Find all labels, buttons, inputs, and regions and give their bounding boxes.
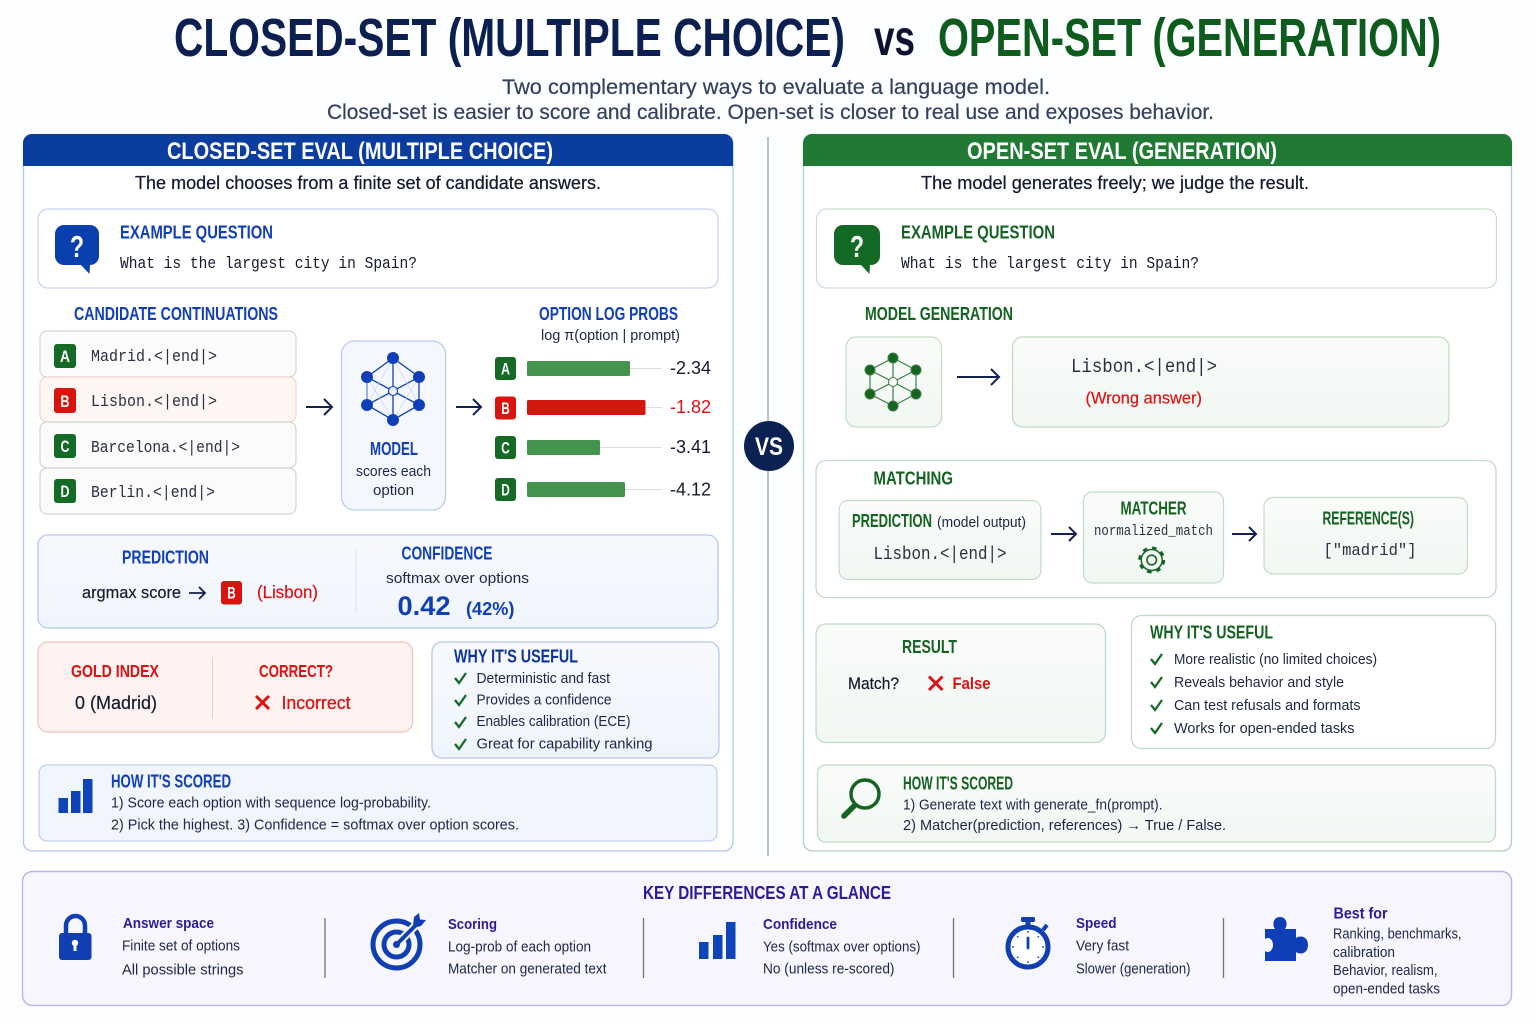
model label: MODEL bbox=[370, 439, 418, 459]
prediction box: PREDICTION bbox=[852, 511, 932, 531]
item: scoring: Log-prob of each option bbox=[448, 940, 591, 956]
icon: stopwatch bbox=[1008, 917, 1048, 967]
result box bbox=[816, 624, 1106, 742]
item: answer space: All possible strings bbox=[122, 962, 244, 978]
generated text: Lisbon.<|end|> bbox=[1071, 356, 1217, 378]
panel description: open-set: The model generates freely; we judge the result. bbox=[921, 173, 1309, 193]
heading: result: RESULT bbox=[902, 637, 957, 657]
why it's useful box: closed-set bbox=[432, 642, 719, 758]
heading: candidate continuations: CANDIDATE CONTINUATIONS bbox=[74, 304, 278, 324]
prediction and confidence box bbox=[38, 535, 718, 628]
arrow: model to generated text bbox=[957, 369, 999, 385]
heading: option log probs: OPTION LOG PROBS bbox=[539, 304, 678, 324]
match verdict bbox=[848, 674, 990, 693]
benefit list: More realistic (no limited choices) bbox=[1174, 652, 1377, 668]
bar D: D bbox=[501, 480, 510, 500]
icon: question bubble: ? bbox=[70, 229, 84, 264]
model box bbox=[342, 341, 446, 510]
item: scoring: Matcher on generated text bbox=[448, 962, 606, 978]
how it's scored box: open-set bbox=[818, 765, 1496, 842]
item: best for: calibration bbox=[1333, 945, 1395, 961]
model caption bbox=[356, 464, 431, 499]
item: scoring: Scoring bbox=[448, 916, 497, 933]
why it's useful box: open-set bbox=[1132, 616, 1496, 748]
confidence caption: softmax over options bbox=[386, 571, 529, 587]
scoring steps bbox=[903, 798, 1226, 834]
confidence value bbox=[398, 591, 514, 621]
bar C: -3.41 bbox=[670, 436, 711, 457]
confidence value: (42%) bbox=[466, 598, 514, 619]
matcher box: MATCHER bbox=[1120, 498, 1186, 518]
argmax line: B bbox=[227, 584, 236, 602]
option C: Barcelona.<|end|> bbox=[91, 438, 240, 457]
scoring steps: 2) Pick the highest. 3) Confidence = softmax over option scores. bbox=[111, 818, 519, 834]
item: best for bbox=[1265, 906, 1462, 998]
option C bbox=[40, 422, 296, 468]
matching panel bbox=[816, 460, 1496, 598]
icon: network bbox=[865, 353, 921, 411]
candidate list bbox=[40, 331, 296, 514]
subtitle: Closed-set is easier to score and calibrate. Open-set is closer to real use and exposes behavior. bbox=[327, 101, 1214, 124]
how it's scored box: closed-set bbox=[39, 765, 717, 841]
subtitle bbox=[327, 76, 1214, 124]
item: best for: Ranking, benchmarks, bbox=[1333, 926, 1462, 942]
gold index and correctness box bbox=[38, 642, 412, 732]
heading: correct: CORRECT? bbox=[259, 661, 333, 681]
gold value: 0 (Madrid) bbox=[75, 692, 157, 713]
bar C bbox=[495, 436, 711, 459]
icon: bar chart bbox=[58, 779, 92, 813]
benefit list bbox=[1151, 652, 1377, 737]
item: answer space: Answer space bbox=[123, 915, 214, 932]
item: answer space: Finite set of options bbox=[122, 938, 240, 954]
option D: D bbox=[60, 482, 70, 501]
item: confidence: No (unless re-scored) bbox=[763, 962, 894, 978]
option D bbox=[40, 468, 296, 514]
confidence value: 0.42 bbox=[398, 591, 450, 621]
bar D bbox=[495, 478, 711, 501]
panel: closed-set eval bbox=[23, 134, 733, 851]
benefit list: Provides a confidence bbox=[476, 692, 612, 708]
icon: question bubble bbox=[55, 225, 99, 274]
heading: how scored: HOW IT'S SCORED bbox=[111, 772, 231, 792]
option B bbox=[40, 377, 296, 422]
panel: open-set eval bbox=[803, 134, 1512, 851]
item: confidence: Confidence bbox=[763, 916, 837, 933]
item: speed: Very fast bbox=[1076, 938, 1129, 954]
bar B bbox=[495, 396, 711, 420]
item: best for: Behavior, realism, bbox=[1333, 963, 1438, 979]
bar C: C bbox=[501, 438, 510, 458]
bar A: -2.34 bbox=[670, 357, 711, 378]
heading: gold index: GOLD INDEX bbox=[71, 661, 159, 681]
benefit list: Great for capability ranking bbox=[476, 736, 652, 752]
reference box: ["madrid"] bbox=[1324, 542, 1416, 561]
argmax line bbox=[82, 581, 318, 604]
scoring steps: 1) Score each option with sequence log-probability. bbox=[111, 796, 431, 812]
heading: how scored: HOW IT'S SCORED bbox=[903, 774, 1013, 794]
icon: gear bbox=[1140, 548, 1164, 572]
prediction box: Lisbon.<|end|> bbox=[874, 545, 1006, 565]
example question box: open-set bbox=[816, 209, 1496, 288]
reference box: REFERENCE(S) bbox=[1322, 508, 1414, 528]
icon: lock bbox=[59, 916, 92, 960]
formula: log pi: log π(option | prompt) bbox=[541, 328, 680, 344]
icon: puzzle piece bbox=[1265, 917, 1308, 961]
icon: question bubble: ? bbox=[850, 229, 864, 264]
benefit list: Can test refusals and formats bbox=[1174, 698, 1360, 714]
item: speed: Speed bbox=[1076, 915, 1116, 932]
icon: network bbox=[362, 352, 424, 426]
bar chart: log probs bbox=[495, 357, 711, 501]
argmax line: (Lisbon) bbox=[257, 582, 318, 602]
option A bbox=[40, 331, 296, 377]
icon: magnifier bbox=[844, 780, 879, 816]
benefit list bbox=[455, 671, 652, 752]
benefit list: Reveals behavior and style bbox=[1174, 675, 1344, 691]
arrow: options to model bbox=[306, 399, 332, 415]
benefit list: Works for open-ended tasks bbox=[1174, 721, 1354, 737]
bar D: -4.12 bbox=[670, 478, 711, 500]
prediction box bbox=[839, 500, 1041, 580]
bar B: -1.82 bbox=[670, 396, 711, 417]
heading: model generation: MODEL GENERATION bbox=[865, 304, 1013, 324]
bar B: B bbox=[501, 399, 510, 418]
scoring steps bbox=[111, 796, 519, 834]
benefit list: Deterministic and fast bbox=[476, 671, 610, 687]
item: best for: Best for bbox=[1334, 906, 1388, 922]
heading: matching: MATCHING bbox=[874, 468, 953, 488]
prediction box: (model output) bbox=[937, 515, 1026, 531]
vs badge: VS bbox=[755, 433, 783, 461]
icon: bar chart bbox=[699, 922, 736, 959]
heading: example question: EXAMPLE QUESTION bbox=[120, 222, 273, 242]
panel: key differences bbox=[22, 872, 1512, 1006]
option C: C bbox=[60, 437, 70, 456]
center divider bbox=[767, 137, 769, 856]
icon: target bbox=[373, 913, 426, 968]
benefit list: Enables calibration (ECE) bbox=[476, 714, 630, 730]
scoring steps: 1) Generate text with generate_fn(prompt). bbox=[903, 798, 1162, 814]
item: scoring bbox=[373, 913, 606, 978]
subtitle: Two complementary ways to evaluate a language model. bbox=[502, 76, 1050, 99]
matcher box: normalized_match bbox=[1094, 524, 1213, 540]
model caption: option bbox=[373, 483, 414, 499]
arrow: prediction to matcher bbox=[1051, 527, 1076, 541]
wrong answer note: (Wrong answer) bbox=[1086, 388, 1202, 408]
item: speed bbox=[1008, 915, 1190, 978]
heading: prediction: PREDICTION bbox=[122, 548, 209, 568]
item: confidence: Yes (softmax over options) bbox=[763, 940, 920, 956]
model caption: scores each bbox=[356, 464, 431, 480]
icon: question bubble bbox=[834, 225, 880, 274]
vs badge bbox=[744, 421, 794, 471]
title: CLOSED-SET (MULTIPLE CHOICE) bbox=[174, 8, 845, 68]
title: vs bbox=[874, 10, 915, 66]
panel heading: open-set: OPEN-SET EVAL (GENERATION) bbox=[967, 138, 1277, 165]
question text: What is the largest city in Spain? bbox=[120, 255, 417, 274]
option B: B bbox=[60, 392, 70, 411]
match verdict: Match? bbox=[848, 674, 899, 693]
matcher box bbox=[1084, 492, 1224, 583]
argmax line: argmax score bbox=[82, 583, 181, 602]
generated output box bbox=[1012, 337, 1449, 427]
option A: Madrid.<|end|> bbox=[91, 347, 217, 366]
panel heading: closed-set: CLOSED-SET EVAL (MULTIPLE CHOICE) bbox=[167, 138, 553, 165]
item: speed: Slower (generation) bbox=[1076, 962, 1190, 978]
item: best for: open-ended tasks bbox=[1333, 982, 1440, 998]
heading: why useful: WHY IT'S USEFUL bbox=[454, 646, 578, 666]
example question box: closed-set bbox=[38, 209, 718, 288]
reference box bbox=[1264, 498, 1468, 574]
option B: Lisbon.<|end|> bbox=[91, 392, 217, 411]
model icon box bbox=[846, 337, 942, 427]
item: answer space bbox=[59, 915, 244, 978]
item: confidence bbox=[699, 916, 920, 978]
scoring steps: 2) Matcher(prediction, references) → True / False. bbox=[903, 818, 1226, 834]
arrow: matcher to reference bbox=[1232, 527, 1256, 541]
option A: A bbox=[60, 347, 70, 366]
panel description: closed-set: The model chooses from a finite set of candidate answers. bbox=[135, 173, 601, 193]
bar A bbox=[495, 357, 711, 380]
heading: confidence: CONFIDENCE bbox=[402, 544, 492, 564]
match verdict: False bbox=[952, 674, 990, 693]
question text: What is the largest city in Spain? bbox=[901, 255, 1199, 274]
verdict: incorrect: Incorrect bbox=[282, 692, 350, 713]
heading: key differences: KEY DIFFERENCES AT A GLANCE bbox=[643, 882, 891, 903]
option D: Berlin.<|end|> bbox=[91, 483, 215, 502]
bar A: A bbox=[501, 360, 510, 378]
heading: why useful: WHY IT'S USEFUL bbox=[1150, 622, 1273, 642]
arrow: model to log probs bbox=[456, 399, 481, 415]
heading: example question: EXAMPLE QUESTION bbox=[901, 222, 1055, 242]
